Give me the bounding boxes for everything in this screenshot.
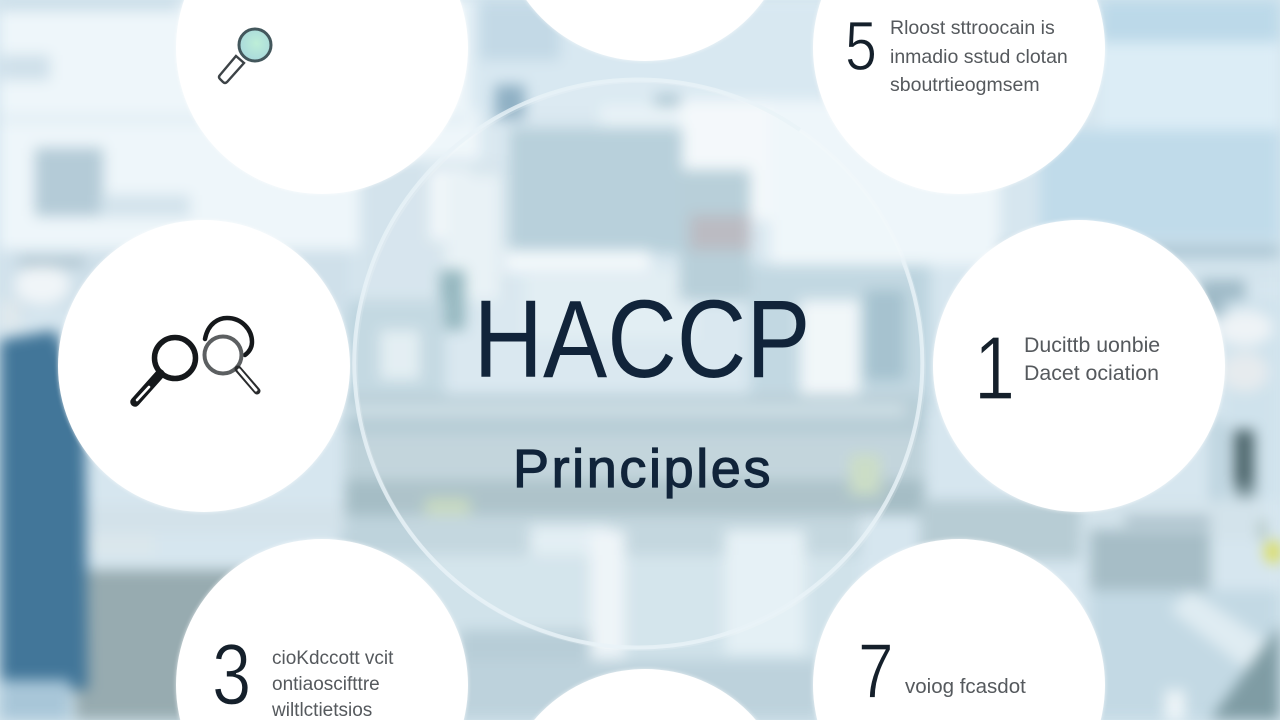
text: principle 5 description xyxy=(890,17,1068,96)
icon: teal magnifying glass xyxy=(218,28,272,84)
text: principle 3 description: ontiaoscifttre xyxy=(272,674,380,695)
text: principle 7 description: voiog fcasdot xyxy=(905,675,1026,698)
icon: two magnifying glasses xyxy=(130,316,260,407)
panel: principle 1 xyxy=(933,220,1225,512)
subtitle: Principles: Principles xyxy=(513,439,773,499)
text: principle 3 description: cioKdccott vcit xyxy=(272,648,393,669)
panel: principle 5 xyxy=(813,0,1105,194)
text: principle 1 description: Dacet ociation xyxy=(1024,360,1159,384)
text: principle 1 description: Ducittb uonbie xyxy=(1024,333,1160,357)
panel: principle 7 xyxy=(813,539,1105,720)
panel: top-centre circle xyxy=(499,0,791,61)
text: principle 1 description xyxy=(1024,333,1160,384)
panel: bottom-centre circle xyxy=(499,669,791,720)
panel: top-left magnifier xyxy=(176,0,468,194)
text: principle 5 description: Rloost sttroocain is xyxy=(890,17,1055,39)
text: principle 3 description xyxy=(272,648,394,720)
title: HACCP: HACCP xyxy=(474,278,810,401)
text: principle 5 description: inmadio sstud clotan xyxy=(890,46,1068,68)
panel: principle 3 xyxy=(176,539,468,720)
number 7: 7 xyxy=(858,627,894,715)
panel: magnifiers xyxy=(58,220,350,512)
number 5: 5 xyxy=(845,7,877,85)
number 1: 1 xyxy=(974,319,1015,419)
text: principle 5 description: sboutrtieogmsem xyxy=(890,74,1040,96)
